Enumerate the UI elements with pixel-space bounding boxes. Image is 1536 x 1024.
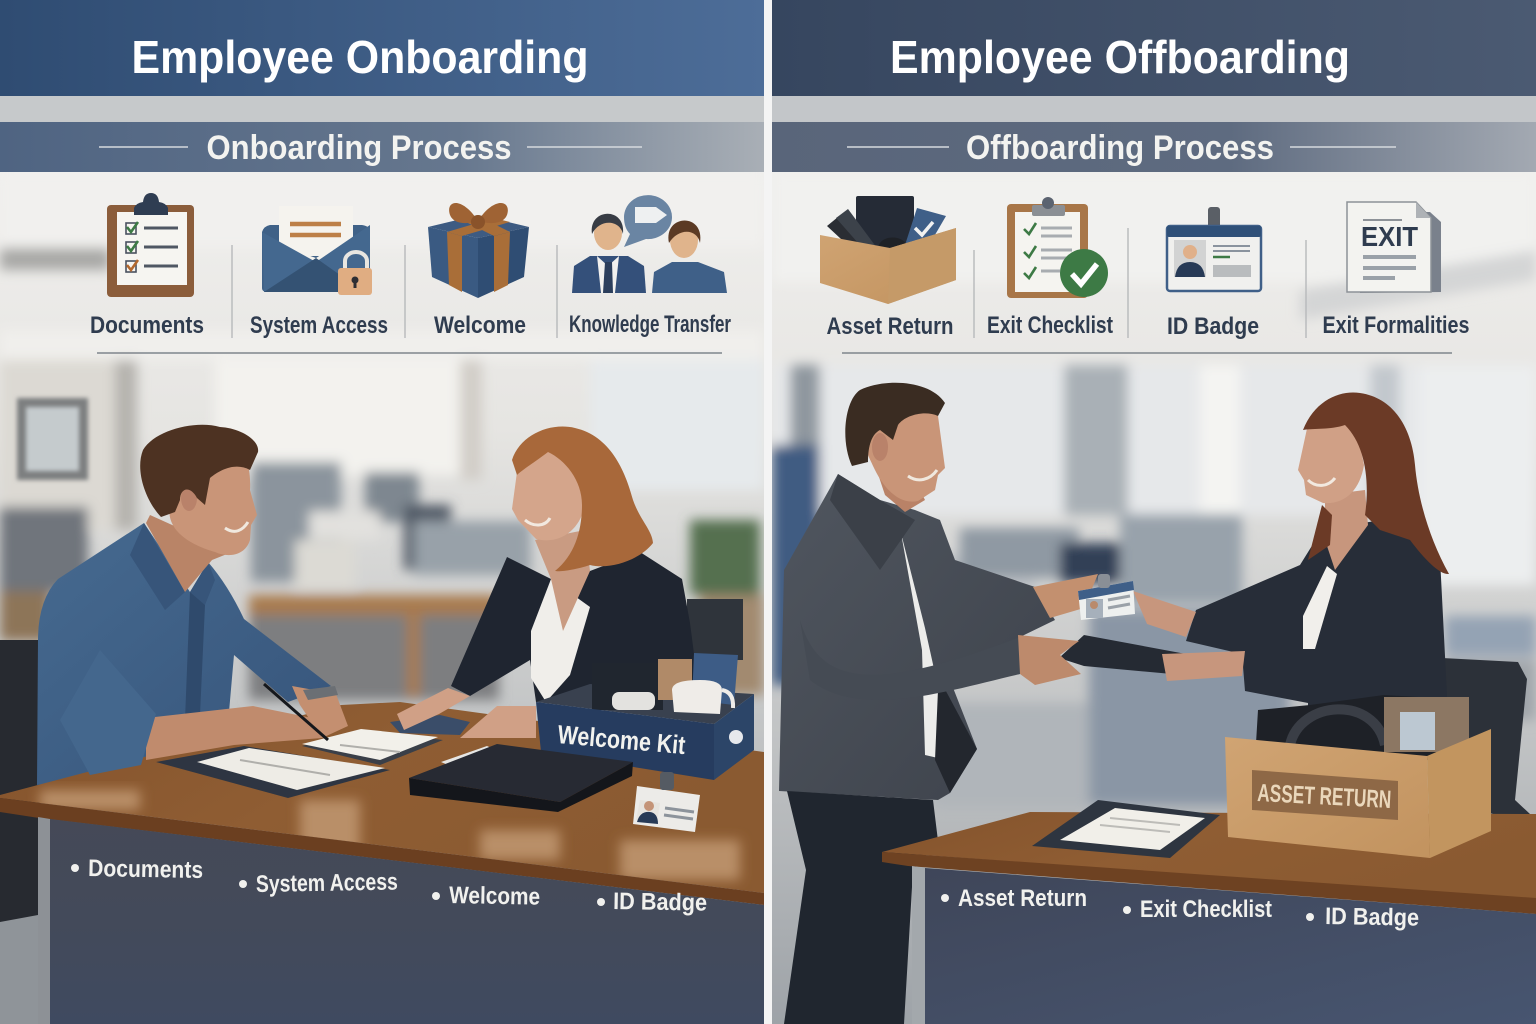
label: id badge: ID Badge <box>1167 313 1259 340</box>
woman: onboarding <box>451 427 743 702</box>
label: system access: System Access <box>250 312 388 339</box>
bullet list: offboarding: ID Badge <box>1325 903 1419 932</box>
bullet list: offboarding: Asset Return <box>958 885 1087 912</box>
laptop <box>409 744 633 812</box>
bullet list: onboarding: Documents <box>88 855 203 884</box>
icon: system access envelope <box>262 222 372 295</box>
label: knowledge transfer: Knowledge Transfer <box>569 311 731 338</box>
icon: knowledge transfer <box>572 195 727 293</box>
label: welcome kit: Welcome Kit <box>556 719 687 760</box>
label: asset return: Asset Return <box>826 313 954 340</box>
bullet list: onboarding: System Access <box>256 869 398 898</box>
documents on desk <box>156 729 443 798</box>
bullet list: onboarding: ID Badge <box>613 888 707 917</box>
desk: onboarding <box>0 702 764 1024</box>
tablet under hands <box>390 715 470 735</box>
label: exit formalities: Exit Formalities <box>1322 312 1470 339</box>
icon: id badge <box>1167 207 1261 291</box>
header: offboarding <box>772 0 1536 96</box>
man: offboarding <box>779 383 1055 1024</box>
welcome kit box <box>536 653 754 780</box>
panel: offboarding <box>772 0 1536 1024</box>
label: documents: Documents <box>90 312 204 339</box>
subheader band: offboarding: Offboarding Process <box>966 129 1274 167</box>
asset return box <box>1225 695 1491 858</box>
subheader band: onboarding: Onboarding Process <box>206 129 512 167</box>
id badge being handed over <box>1078 574 1135 620</box>
man forearms <box>78 683 348 775</box>
title: offboarding: Employee Offboarding <box>890 31 1350 83</box>
office background right <box>772 172 1536 1024</box>
divider <box>764 0 772 1024</box>
man: onboarding <box>37 425 331 785</box>
icon: documents clipboard <box>107 193 194 297</box>
hands <box>1018 574 1245 685</box>
icon: exit checklist <box>1007 197 1108 298</box>
light band <box>0 96 764 122</box>
icon: asset box <box>820 196 956 304</box>
chair left <box>0 640 40 922</box>
bullet list: offboarding <box>941 885 1419 932</box>
header: onboarding <box>0 0 764 96</box>
title: onboarding: Employee Onboarding <box>132 31 588 83</box>
panel: onboarding <box>0 0 764 1024</box>
icon: exit document: EXIT <box>1361 221 1418 252</box>
icon: exit document <box>1347 202 1441 293</box>
label: welcome: Welcome <box>434 312 526 339</box>
label: asset return: ASSET RETURN <box>1257 779 1392 814</box>
icon: welcome gift <box>428 203 529 298</box>
desk: offboarding <box>882 812 1536 1024</box>
bullet list: offboarding: Exit Checklist <box>1140 896 1272 923</box>
office background left <box>0 172 764 1024</box>
chair right <box>1442 658 1530 814</box>
woman hands <box>397 688 536 738</box>
bullet list: onboarding: Welcome <box>449 882 540 911</box>
light band right <box>772 96 1536 122</box>
subheader band: onboarding <box>0 122 764 172</box>
laptop being handed over <box>1059 635 1186 674</box>
folder on desk <box>1032 800 1220 858</box>
id badge on desk <box>633 772 700 832</box>
bullet list: onboarding <box>71 855 707 917</box>
label: exit checklist: Exit Checklist <box>987 312 1113 339</box>
subheader band: offboarding <box>772 122 1536 172</box>
woman: offboarding <box>1186 392 1449 706</box>
